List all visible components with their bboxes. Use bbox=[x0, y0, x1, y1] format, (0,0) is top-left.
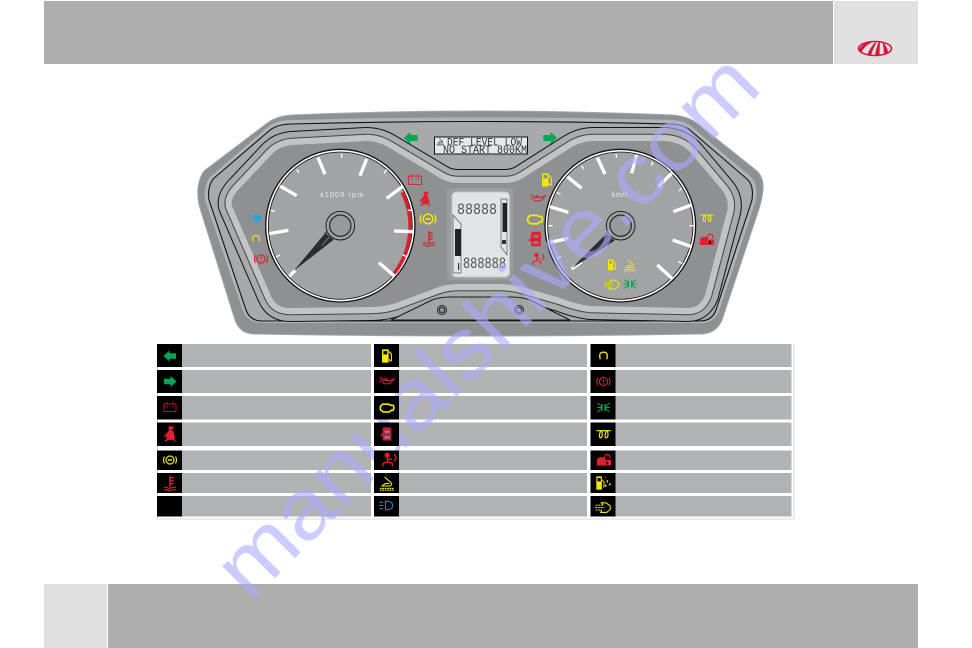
odometer digits bottom: 888888 bbox=[463, 255, 506, 273]
icon: glow plug bbox=[700, 215, 714, 222]
icon: red oval brand logo bbox=[858, 42, 892, 56]
message line 2: NO START 800KM bbox=[443, 145, 527, 157]
icon: exhaust bbox=[595, 503, 610, 512]
warning lamps right bbox=[528, 173, 714, 289]
icon: brake bbox=[254, 255, 268, 263]
icon: glow plug bbox=[596, 431, 611, 438]
icon: oil bbox=[531, 195, 546, 201]
icon: brake bbox=[597, 377, 610, 386]
housing inner contour bbox=[208, 122, 752, 321]
legend table icon cells bbox=[157, 344, 616, 516]
hub bbox=[606, 211, 635, 240]
icon: lock bbox=[700, 234, 714, 245]
icon: coolant temperature bbox=[423, 231, 435, 246]
warning lamps left bbox=[248, 175, 436, 263]
icon: DEF bbox=[437, 138, 444, 145]
column 3 icons bbox=[595, 352, 611, 512]
frame lines bbox=[157, 344, 794, 519]
legend table background bbox=[157, 344, 794, 519]
icon: right arrow bbox=[164, 376, 177, 387]
message line 1: DEF LEVEL LOW bbox=[447, 138, 522, 150]
icon: door bbox=[528, 232, 541, 246]
watermark: manualshive.com bbox=[196, 34, 778, 616]
hub bbox=[326, 211, 355, 240]
icon: parking bbox=[420, 214, 436, 224]
cluster housing bbox=[198, 111, 763, 336]
icon: water in fuel bbox=[624, 260, 636, 271]
icon: oil bbox=[380, 378, 395, 384]
unit label: x1000 rpm bbox=[320, 190, 363, 199]
icon: battery bbox=[408, 175, 422, 184]
odometer digits top: 88888 bbox=[457, 201, 497, 219]
unit label: km/h bbox=[612, 190, 629, 199]
instrument cluster bbox=[198, 111, 763, 336]
header bar bbox=[44, 1, 833, 64]
message display bbox=[434, 137, 528, 157]
column 1 icons bbox=[163, 350, 177, 491]
footer bar bbox=[108, 584, 918, 648]
column 2 icons bbox=[379, 349, 396, 510]
icon: engine bbox=[528, 215, 542, 224]
left arrow indicator bbox=[404, 132, 418, 144]
icon: airbag bbox=[382, 453, 396, 467]
gray description rows bbox=[182, 344, 792, 516]
right arrow indicator bbox=[543, 132, 557, 144]
central LCD bbox=[447, 188, 513, 280]
icon: seat belt bbox=[420, 192, 430, 206]
icon: door bbox=[380, 427, 391, 441]
temperature bar scale bbox=[453, 215, 461, 273]
icon: beam bbox=[379, 501, 393, 510]
icon: left arrow bbox=[163, 350, 176, 362]
icon: fuel leak bbox=[596, 476, 611, 490]
left trip knob bbox=[438, 306, 446, 314]
needle bbox=[572, 230, 617, 268]
right trip knob bbox=[514, 306, 524, 314]
icon: fuel bbox=[382, 349, 391, 363]
needle bbox=[294, 230, 336, 271]
icon: arc indicator bbox=[252, 236, 260, 242]
red zone bbox=[394, 192, 410, 273]
icon: seat belt bbox=[164, 426, 176, 442]
icon: temperature bbox=[164, 476, 176, 491]
icon: fuel bbox=[542, 173, 551, 187]
icon: lock bbox=[597, 454, 611, 465]
icon: airbag bbox=[532, 253, 544, 264]
fuel bar scale bbox=[501, 199, 507, 255]
icon: side lights bbox=[624, 280, 636, 288]
tick marks bbox=[548, 154, 693, 279]
speedometer gauge bbox=[544, 149, 696, 303]
icon: battery bbox=[164, 403, 176, 412]
icon: arc bbox=[600, 352, 607, 359]
icon: engine bbox=[380, 404, 394, 412]
icon: water in fuel bbox=[380, 477, 394, 490]
icon: side lights bbox=[597, 403, 610, 412]
icon: parking bbox=[164, 456, 176, 464]
icon: low fuel bbox=[608, 260, 616, 270]
pod bezel bbox=[232, 141, 728, 308]
logo panel bbox=[834, 1, 918, 64]
footer page-number panel bbox=[44, 584, 107, 648]
icon: exhaust bbox=[605, 280, 619, 289]
tick marks bbox=[269, 154, 414, 276]
black icon cells bbox=[157, 344, 616, 516]
tachometer gauge bbox=[265, 149, 416, 303]
housing light edge bbox=[205, 118, 756, 323]
lower centre trim with adjusters bbox=[391, 297, 570, 320]
icon: headlamp high beam bbox=[248, 214, 262, 222]
